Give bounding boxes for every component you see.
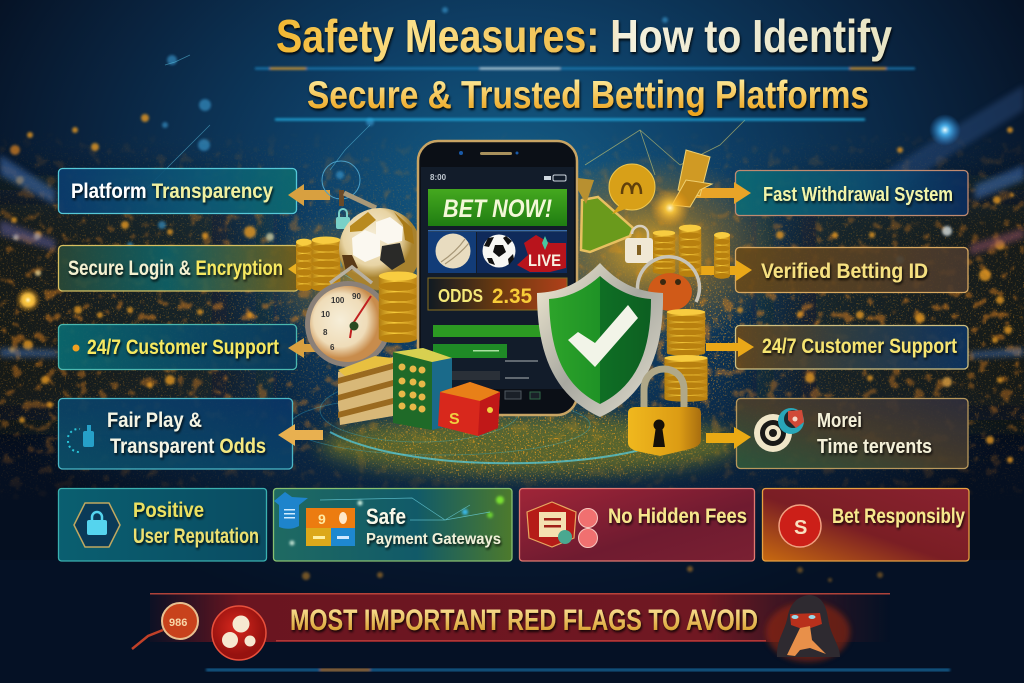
red flags banner (132, 593, 890, 662)
icon: football (482, 234, 516, 268)
icon: small lock and magnifier (322, 161, 376, 229)
odds row (428, 278, 567, 310)
heading line 1: Safety Measures: How to Identify (276, 10, 892, 62)
panel: Safe Payment Gateways: Safe (366, 504, 406, 529)
icon: phone: 8:00 (430, 173, 447, 182)
panel: Bet Responsibly (762, 488, 969, 561)
icon: tag lock (625, 226, 653, 263)
icon: stopwatch: 90 (352, 292, 361, 301)
panel: Bet Responsibly: Bet Responsibly (832, 505, 965, 528)
central illustration (296, 141, 730, 456)
icon: magnifier tag (132, 603, 198, 649)
arrow: to Verified (700, 260, 752, 281)
panel: Positive User Reputation (58, 488, 266, 561)
icon: red clock: S (794, 517, 807, 539)
icon: hooded scammer (766, 595, 850, 662)
odds row: ODDS (438, 286, 483, 306)
panel: 24/7 Customer Support right: 24/7 Customer Support (762, 335, 957, 358)
icon: red die: S (449, 411, 460, 428)
icon: thumbs up (68, 425, 94, 452)
panel: 24/7 Customer Support left (58, 324, 296, 370)
icon: red clock (779, 505, 821, 547)
icon: stacked chips (338, 356, 393, 425)
panel: No Hidden Fees: No Hidden Fees (608, 505, 747, 528)
panel: Positive User Reputation: Positive (133, 499, 204, 522)
panel: More Time: Time tervents (817, 436, 932, 458)
icon: payment card: 9 (318, 511, 326, 527)
panel: Fast Withdrawal System (736, 170, 968, 216)
arrow: to More Time (706, 427, 751, 449)
arrow: to left support (288, 338, 322, 358)
panel: No Hidden Fees (520, 488, 754, 561)
panel: Safe Payment Gateways: Payment Gateways (366, 531, 501, 548)
arrow: to Fast Withdrawal (690, 182, 751, 204)
panel: Fair Play & Transparent Odds (58, 398, 292, 469)
panel: Secure Login & Encryption: Secure Login & Encryption (68, 257, 283, 280)
arrow: to Fair Play (278, 424, 323, 446)
icon: shield with check (537, 263, 663, 417)
icon: LIVE badge: LIVE (528, 251, 561, 270)
panel: Secure Login & Encryption (58, 246, 298, 291)
arrow: to Secure Login (288, 258, 330, 280)
panel: More Time (736, 398, 968, 468)
icon: receipt tag (274, 492, 308, 529)
icon: target chip (754, 408, 804, 452)
panel: Positive User Reputation: User Reputation (133, 525, 259, 548)
icon: stopwatch: 6 (330, 343, 335, 352)
icon: back coins left (296, 236, 340, 292)
title (276, 10, 892, 117)
icon: red circle (212, 606, 266, 660)
heading line 2: Secure & Trusted Betting Platforms (307, 74, 869, 117)
panel: Platform Transparency: Platform Transparency (71, 180, 273, 203)
icon: coin stack left (379, 271, 417, 343)
panel: 24/7 Customer Support right (736, 326, 968, 369)
red flags banner: MOST IMPORTANT RED FLAGS TO AVOID (290, 604, 758, 637)
panel: Fair Play & Transparent Odds: Fair Play & (107, 409, 202, 432)
icon: stopwatch: 8 (323, 328, 328, 337)
button: BET NOW (428, 189, 567, 226)
icon: red die (438, 382, 500, 436)
panel: Platform Transparency (58, 168, 296, 214)
icon: coin stack right (664, 309, 708, 402)
icon: gold money items (578, 150, 712, 252)
icon: back coins right (653, 225, 730, 279)
panel: Safe Payment Gateways (274, 488, 512, 561)
icon: lock badge (74, 503, 120, 547)
icon: cricket ball (436, 234, 470, 268)
icon: payment card (306, 508, 355, 546)
icon: magnifier tag: 986 (169, 617, 187, 629)
icon: phone (418, 141, 577, 415)
odds row: 2.35 (492, 285, 532, 308)
panel: Fast Withdrawal System: Fast Withdrawal System (763, 184, 953, 206)
icon: green die (393, 348, 452, 430)
icon: LIVE badge (517, 235, 566, 272)
panel: Verified Betting ID: Verified Betting ID (761, 260, 928, 283)
icon: stopwatch: 10 (321, 310, 330, 319)
icon: padlock (628, 369, 701, 456)
arrow: to right support (706, 337, 754, 357)
panel: Fair Play & Transparent Odds: Transparent Odds (110, 435, 266, 458)
icon: orange mascot ring (637, 257, 699, 311)
icon: stopwatch (305, 267, 391, 367)
icon: document badge (527, 502, 598, 548)
icon: stopwatch: 100 (331, 296, 345, 305)
panel: 24/7 Customer Support left: 24/7 Customer Support (87, 336, 279, 359)
panel: More Time: Morei (817, 410, 862, 432)
button: BET NOW: BET NOW! (443, 195, 552, 223)
arrow: to Platform Transparency (288, 184, 330, 206)
panel: Verified Betting ID (736, 248, 968, 292)
icon: soccer ball back (339, 208, 421, 290)
